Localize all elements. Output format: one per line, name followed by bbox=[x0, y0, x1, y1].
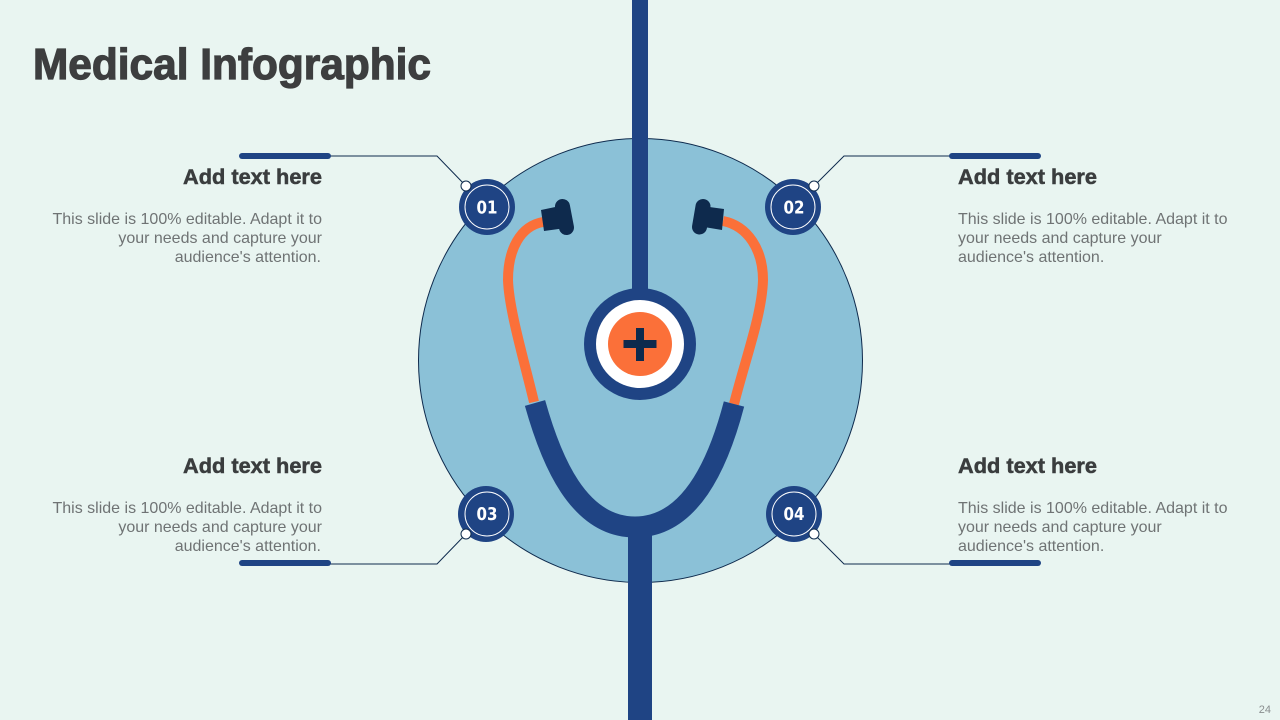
top tube bbox=[632, 0, 648, 300]
badge 03: 03 bbox=[476, 504, 498, 525]
background circle bbox=[418, 138, 862, 582]
text block: top right: This slide is 100% editable. Adapt it to bbox=[958, 211, 1228, 228]
text block: bottom right: Add text here bbox=[958, 455, 1097, 478]
plus icon bbox=[624, 328, 656, 361]
text block: bottom right bbox=[958, 455, 1228, 555]
badge 01: 01 bbox=[476, 198, 498, 218]
badge 03 bbox=[458, 486, 514, 542]
badge 04: 04 bbox=[784, 504, 804, 525]
connector: top right bbox=[814, 153, 1041, 186]
bottom tube bbox=[628, 530, 652, 720]
navy Y tube bbox=[535, 403, 734, 527]
badge 02: 02 bbox=[784, 198, 804, 218]
text block: bottom right: your needs and capture your bbox=[958, 519, 1162, 536]
text block: bottom right: audience's attention. bbox=[958, 538, 1104, 555]
text block: top left: This slide is 100% editable. Adapt it to bbox=[52, 211, 322, 228]
stethoscope illustration bbox=[508, 0, 763, 720]
badge 01 bbox=[459, 179, 515, 235]
badge 04 bbox=[766, 486, 822, 542]
connector: bottom left bbox=[239, 534, 466, 566]
text block: top left: Add text here bbox=[183, 166, 322, 189]
page number: 24 bbox=[1259, 704, 1271, 716]
text block: top left: your needs and capture your bbox=[118, 230, 323, 247]
left orange tube bbox=[508, 222, 543, 402]
text block: bottom right: This slide is 100% editable. Adapt it to bbox=[958, 500, 1228, 517]
right orange tube bbox=[723, 221, 763, 404]
connector: top left bbox=[239, 153, 466, 186]
text block: top left: audience's attention. bbox=[175, 249, 321, 266]
text block: top right bbox=[958, 166, 1228, 266]
right earpiece bbox=[698, 206, 724, 230]
badge 02 bbox=[765, 179, 821, 235]
chest piece bbox=[584, 288, 696, 400]
text block: bottom left: audience's attention. bbox=[175, 538, 321, 555]
left earpiece bbox=[541, 206, 566, 231]
title: Medical Infographic bbox=[33, 40, 431, 89]
text block: top right: your needs and capture your bbox=[958, 230, 1162, 247]
text block: bottom left: Add text here bbox=[183, 455, 322, 478]
text block: bottom left: your needs and capture your bbox=[118, 519, 323, 536]
text block: bottom left: This slide is 100% editable. Adapt it to bbox=[52, 500, 322, 517]
text block: bottom left bbox=[52, 455, 323, 555]
text block: top left bbox=[52, 166, 323, 266]
text block: top right: Add text here bbox=[958, 166, 1097, 189]
text block: top right: audience's attention. bbox=[958, 249, 1104, 266]
connector: bottom right bbox=[814, 534, 1041, 566]
